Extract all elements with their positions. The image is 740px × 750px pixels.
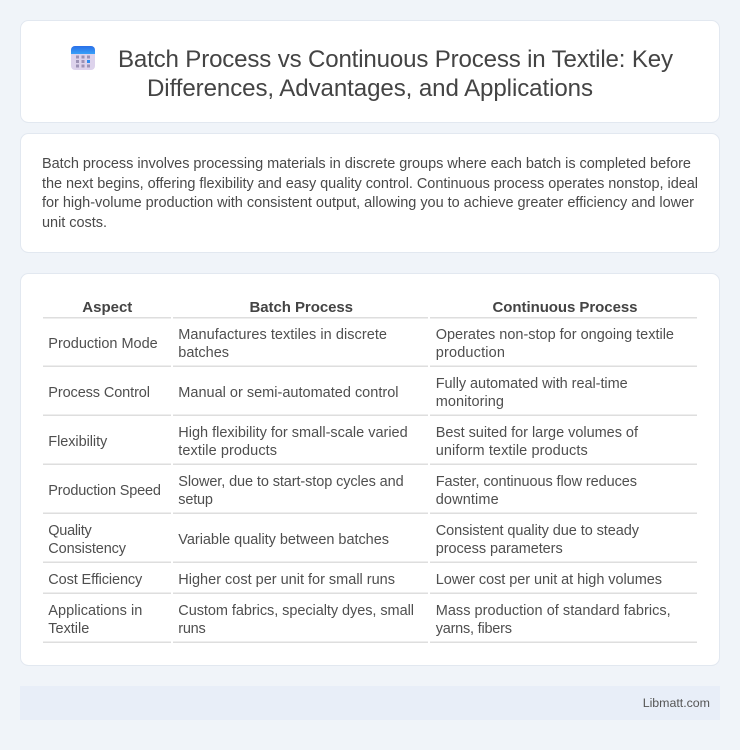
panel: title card — [20, 20, 720, 122]
row: production speed: setup — [178, 492, 213, 508]
row: production mode: Operates non-stop for ongoing textile — [436, 327, 674, 343]
row: quality consistency: Consistency — [48, 541, 127, 557]
intro paragraph: for high-volume production with consistent output, allowing you to achieve greater efficiency and lower — [42, 195, 694, 211]
table rules — [43, 317, 697, 643]
table header — [82, 299, 638, 316]
intro paragraph: Batch process involves processing materials in discrete groups where each batch is completed before — [42, 156, 691, 172]
table header: Continuous Process — [492, 299, 638, 316]
footer bar — [20, 686, 720, 720]
intro paragraph: the next begins, offering flexibility and easy quality control. Continuous process operates nonstop, ideal — [42, 176, 698, 192]
row: cost efficiency — [48, 572, 662, 588]
row: production speed: Faster, continuous flow reduces — [436, 474, 637, 490]
title: Batch Process vs Continuous Process in Textile: Key — [118, 46, 673, 73]
row: flexibility: uniform textile products — [436, 443, 588, 459]
row: applications in textile: Mass production of standard fabrics, — [436, 603, 671, 619]
row: process control: monitoring — [436, 394, 504, 410]
row: applications in textile: yarns, fibers — [436, 621, 512, 637]
row: cost efficiency: Higher cost per unit for small runs — [178, 572, 395, 588]
row: flexibility: High flexibility for small-scale varied — [178, 425, 408, 441]
row: process control: Manual or semi-automated control — [178, 385, 398, 401]
table header: Aspect — [82, 299, 132, 316]
row: applications in textile — [48, 603, 671, 637]
row: production mode: production — [436, 345, 505, 361]
row: quality consistency — [48, 523, 640, 557]
row: production speed — [48, 474, 637, 508]
table header: Batch Process — [250, 299, 353, 316]
row: production mode: batches — [178, 345, 229, 361]
row: cost efficiency: Cost Efficiency — [48, 572, 143, 588]
row: quality consistency: process parameters — [436, 541, 563, 557]
row: flexibility: textile products — [178, 443, 277, 459]
row: production mode: Manufactures textiles in discrete — [178, 327, 387, 343]
title — [118, 46, 673, 102]
row: production speed: Slower, due to start-stop cycles and — [178, 474, 404, 490]
row: quality consistency: Consistent quality due to steady — [436, 523, 640, 539]
row: production speed: Production Speed — [48, 483, 161, 499]
row: cost efficiency: Lower cost per unit at high volumes — [436, 572, 662, 588]
row: flexibility — [48, 425, 639, 459]
intro paragraph: unit costs. — [42, 215, 107, 231]
title: Differences, Advantages, and Applications — [147, 75, 593, 102]
row: applications in textile: runs — [178, 621, 206, 637]
row: quality consistency: Variable quality between batches — [178, 532, 389, 548]
row: production mode — [48, 327, 674, 361]
icon: calendar — [71, 46, 95, 70]
panel: comparison table — [20, 274, 720, 666]
row: process control — [48, 376, 628, 410]
row: process control: Fully automated with real-time — [436, 376, 628, 392]
panel: introduction — [20, 134, 720, 252]
row: quality consistency: Quality — [48, 523, 92, 539]
footer credit: Libmatt.com — [643, 696, 710, 710]
row: production mode: Production Mode — [48, 336, 158, 352]
row: process control: Process Control — [48, 385, 150, 401]
row: production speed: downtime — [436, 492, 499, 508]
row: applications in textile: Textile — [48, 621, 89, 637]
row: flexibility: Flexibility — [48, 434, 108, 450]
row: applications in textile: Applications in — [48, 603, 142, 619]
row: applications in textile: Custom fabrics, specialty dyes, small — [178, 603, 414, 619]
row: flexibility: Best suited for large volumes of — [436, 425, 639, 441]
intro paragraph — [42, 156, 698, 231]
